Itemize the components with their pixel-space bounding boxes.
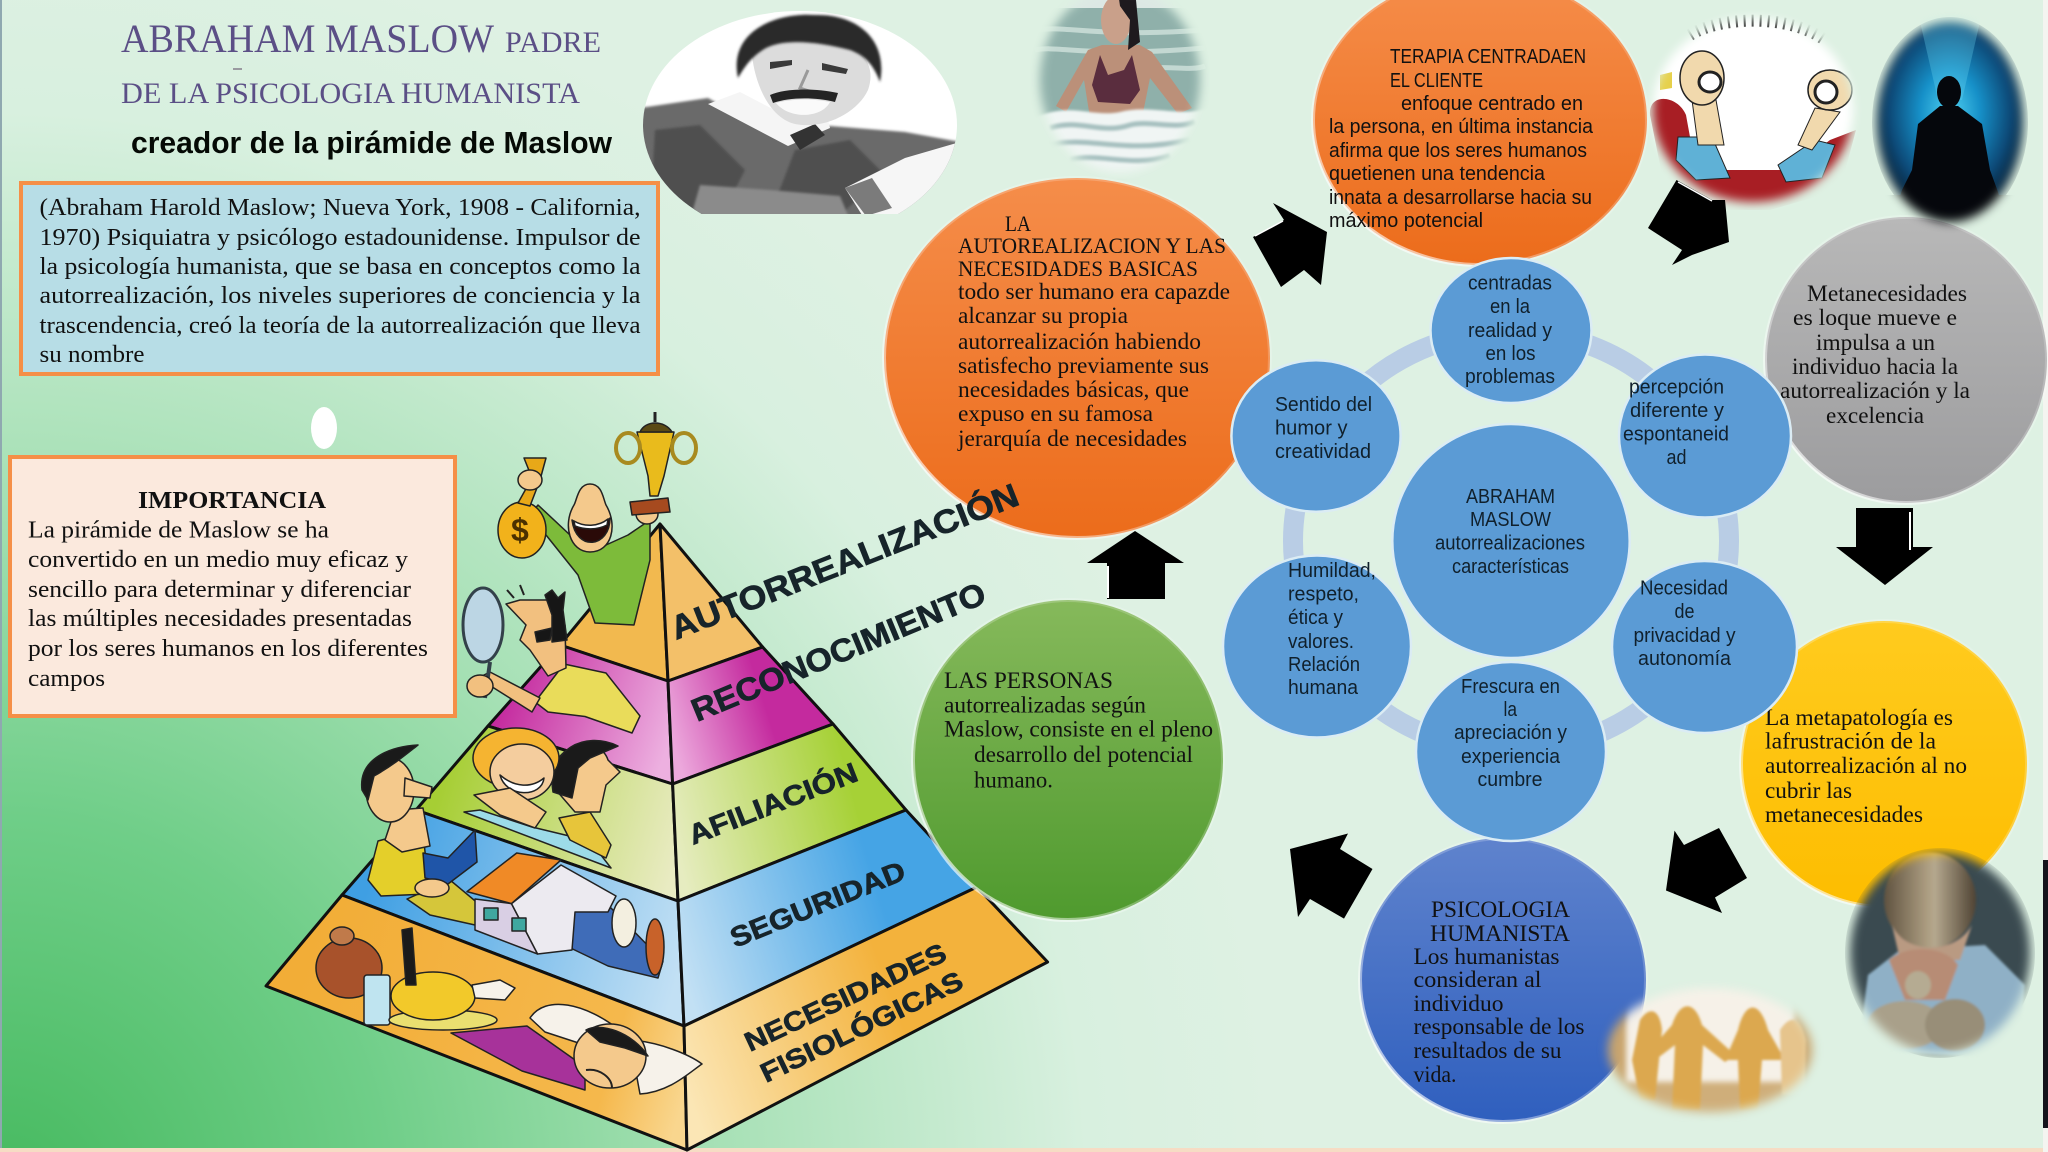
- panel: orange circle client-centered therapy: TERAPIA CENTRADAEN: [1390, 46, 1586, 68]
- pyramid: [266, 412, 1048, 1150]
- panel: green circle self-actualized people: humano.: [974, 768, 1053, 792]
- node: reality centered: [1430, 258, 1592, 403]
- node: freshness: cumbre: [1478, 769, 1542, 791]
- node: humor: [1231, 360, 1401, 512]
- node: center: [1392, 424, 1630, 658]
- importance box: por los seres humanos en los diferentes: [28, 636, 428, 662]
- panel: orange circle client-centered therapy: máximo potencial: [1329, 210, 1483, 232]
- panel: gray circle metaneeds: excelencia: [1826, 403, 1924, 428]
- importance box: las múltiples necesidades presentadas: [28, 606, 412, 632]
- node: perception: ad: [1666, 447, 1686, 469]
- node: perception: diferente y: [1630, 400, 1724, 422]
- node: privacy: [1612, 561, 1797, 733]
- characteristics cycle diagram: [1223, 258, 1797, 841]
- node: perception: espontaneid: [1623, 424, 1729, 446]
- title: creador de la pirámide de Maslow: [131, 125, 613, 160]
- portrait photo: Abraham Maslow: [640, 0, 960, 220]
- panel: orange circle self-actualization: NECESIDADES BASICAS: [958, 256, 1198, 281]
- panel: blue circle humanistic psychology: [1360, 838, 1646, 1122]
- panel: orange circle self-actualization: alcanzar su propia: [958, 303, 1128, 328]
- biography box: 1970) Psiquiatra y psicólogo estadounidense. Impulsor de: [40, 225, 640, 251]
- node: freshness: apreciación y: [1454, 722, 1567, 744]
- node: perception: [1619, 354, 1791, 518]
- panel: green circle self-actualized people: LAS PERSONAS: [944, 668, 1113, 693]
- node: center: autorrealizaciones: [1435, 532, 1585, 554]
- importance box: [10, 457, 455, 716]
- figure: food and sleeping man: [316, 927, 702, 1094]
- panel: orange circle client-centered therapy: quetienen una tendencia: [1329, 163, 1546, 185]
- title: PADRE: [505, 26, 601, 59]
- photo: people holding hands: [1601, 986, 1819, 1118]
- panel: gray circle metaneeds: es loque mueve e: [1793, 305, 1957, 330]
- photo: woman in the sea: [1030, 0, 1210, 180]
- biography box: (Abraham Harold Maslow; Nueva York, 1908 - California,: [40, 195, 640, 221]
- arrow: to green circle: [1290, 834, 1372, 919]
- node: freshness: Frescura en: [1461, 676, 1560, 698]
- node: reality centered: problemas: [1465, 366, 1555, 388]
- node: reality centered: centradas: [1468, 272, 1552, 294]
- panel: blue circle humanistic psychology: HUMANISTA: [1430, 921, 1570, 946]
- panel: yellow circle metapathology: cubrir las: [1765, 778, 1852, 803]
- panel: green circle self-actualized people: autorrealizadas según: [944, 692, 1146, 718]
- panel: gray circle metaneeds: [1765, 217, 2047, 503]
- photo: meditating silhouette: [1872, 0, 2028, 235]
- panel: orange circle client-centered therapy: afirma que los seres humanos: [1329, 140, 1587, 162]
- pyramid labels: RECONOCIMIENTO: [686, 575, 991, 728]
- node: perception: percepción: [1629, 376, 1724, 398]
- node: humility: Humildad,: [1288, 560, 1376, 582]
- title: DE LA PSICOLOGIA HUMANISTA: [121, 77, 580, 110]
- node: humility: respeto,: [1288, 584, 1359, 606]
- pyramid labels: AUTORREALIZACIÓN: [665, 476, 1024, 647]
- biography box: [21, 183, 658, 374]
- node: humor: Sentido del: [1275, 394, 1372, 416]
- panel: blue circle humanistic psychology: individuo: [1414, 991, 1504, 1016]
- panel: orange circle client-centered therapy: EL CLIENTE: [1390, 70, 1483, 92]
- panel: yellow circle metapathology: La metapatología es: [1765, 705, 1953, 730]
- arrow: to therapy circle: [1253, 203, 1327, 287]
- pyramid labels: NECESIDADES: [740, 938, 951, 1057]
- node: humility: [1223, 556, 1411, 738]
- panel: orange circle client-centered therapy: innata a desarrollarse hacia su: [1329, 187, 1592, 209]
- pyramid labels: [665, 476, 1024, 1088]
- node: reality centered: en los: [1486, 343, 1536, 365]
- arrow: to self-actualization: [1087, 531, 1184, 599]
- panel: yellow circle metapathology: lafrustración de la: [1765, 728, 1936, 754]
- panel: orange circle self-actualization: expuso en su famosa: [958, 401, 1153, 426]
- panel: yellow circle metapathology: metanecesidades: [1765, 802, 1923, 827]
- pyramid labels: SEGURIDAD: [726, 855, 910, 954]
- node: reality centered: en la: [1490, 296, 1531, 318]
- figure: man with magnifying glass: [463, 585, 640, 733]
- arrow: to metapathology circle: [1836, 508, 1933, 585]
- panel: green circle self-actualized people: desarrollo del potencial: [974, 742, 1193, 767]
- panel: gray circle metaneeds: impulsa a un: [1816, 330, 1935, 355]
- node: humility: ética y: [1288, 607, 1343, 629]
- node: freshness: [1416, 662, 1606, 841]
- biography box: la psicología humanista, que se basa en conceptos como la: [40, 254, 641, 280]
- node: privacy: de: [1674, 601, 1694, 623]
- panel: orange circle self-actualization: satisfecho previamente sus: [958, 353, 1209, 378]
- node: humility: valores.: [1288, 631, 1354, 653]
- biography box: trascendencia, creó la teoría de la autorrealización que lleva: [40, 313, 641, 339]
- panel: orange circle self-actualization: AUTOREALIZACION Y LAS: [958, 233, 1226, 258]
- importance box: convertido en un medio muy eficaz y: [28, 547, 408, 573]
- pyramid labels: AFILIACIÓN: [684, 757, 862, 851]
- arrow: to humanistic psychology circle: [1666, 828, 1747, 913]
- panel: blue circle humanistic psychology: PSICOLOGIA: [1431, 897, 1570, 922]
- panel: orange circle client-centered therapy: [1313, 0, 1647, 265]
- node: center: MASLOW: [1470, 509, 1551, 531]
- pyramid tiers: [266, 524, 1048, 1150]
- photo: therapist cartoon: [1646, 14, 1856, 210]
- white oval mark: [311, 407, 337, 449]
- node: center: ABRAHAM: [1466, 486, 1555, 508]
- node: humor: creatividad: [1275, 441, 1371, 463]
- panel: orange circle client-centered therapy: la persona, en última instancia: [1329, 116, 1594, 138]
- importance box: IMPORTANCIA: [138, 488, 327, 514]
- node: center: características: [1452, 556, 1569, 578]
- panel: gray circle metaneeds: Metanecesidades: [1807, 281, 1967, 306]
- figure: man with money bag and trophy: [498, 412, 696, 625]
- panel: orange circle client-centered therapy: enfoque centrado en: [1401, 93, 1583, 115]
- panel: gray circle metaneeds: autorrealización y la: [1780, 378, 1970, 403]
- importance box: La pirámide de Maslow se ha: [28, 518, 329, 544]
- arrow: to metaneeds circle: [1648, 180, 1729, 265]
- panel: orange circle self-actualization: LA: [1005, 211, 1031, 236]
- figure: hugging couple: [464, 728, 620, 868]
- node: humility: humana: [1288, 677, 1359, 699]
- node: privacy: privacidad y: [1634, 625, 1736, 647]
- cycle ring: [1293, 331, 1729, 751]
- node: freshness: experiencia: [1461, 746, 1561, 768]
- panel: orange circle self-actualization: jerarquía de necesidades: [957, 426, 1187, 451]
- panel: gray circle metaneeds: individuo hacia la: [1792, 354, 1958, 379]
- node: freshness: la: [1504, 699, 1518, 721]
- node: humility: Relación: [1288, 654, 1360, 676]
- panel: orange circle self-actualization: autorrealización habiendo: [958, 329, 1201, 354]
- panel: blue circle humanistic psychology: Los humanistas: [1414, 944, 1560, 969]
- panel: yellow circle metapathology: autorrealización al no: [1765, 753, 1967, 778]
- title: ABRAHAM MASLOW: [121, 16, 494, 61]
- figure: house and legs: [467, 853, 664, 978]
- panel: green circle self-actualized people: [913, 600, 1223, 920]
- panel: blue circle humanistic psychology: resultados de su: [1414, 1038, 1562, 1063]
- panel: blue circle humanistic psychology: consideran al: [1414, 967, 1542, 992]
- biography box: autorrealización, los niveles superiores de conciencia y la: [40, 283, 641, 309]
- panel: yellow circle metapathology: [1741, 621, 2027, 907]
- photo: crying girl: [1845, 848, 2035, 1060]
- pyramid labels: FISIOLÓGICAS: [755, 965, 968, 1088]
- panel: orange circle self-actualization: necesidades básicas, que: [958, 377, 1189, 402]
- biography box: su nombre: [40, 342, 144, 368]
- title: [121, 16, 613, 160]
- node: privacy: Necesidad: [1640, 578, 1728, 600]
- panel: blue circle humanistic psychology: vida.: [1414, 1062, 1456, 1087]
- node: reality centered: realidad y: [1468, 320, 1552, 342]
- panel: orange circle self-actualization: todo ser humano era capazde: [958, 279, 1230, 304]
- importance box: campos: [28, 666, 105, 692]
- figure: man with money bag and trophy: $: [511, 512, 529, 548]
- figure: man reading book: [362, 745, 480, 925]
- node: privacy: autonomía: [1638, 648, 1732, 670]
- panel: orange circle self-actualization: [884, 178, 1270, 538]
- panel: blue circle humanistic psychology: responsable de los: [1414, 1014, 1585, 1039]
- node: humor: humor y: [1275, 418, 1348, 440]
- panel: green circle self-actualized people: Maslow, consiste en el pleno: [944, 716, 1213, 742]
- importance box: sencillo para determinar y diferenciar: [28, 577, 411, 603]
